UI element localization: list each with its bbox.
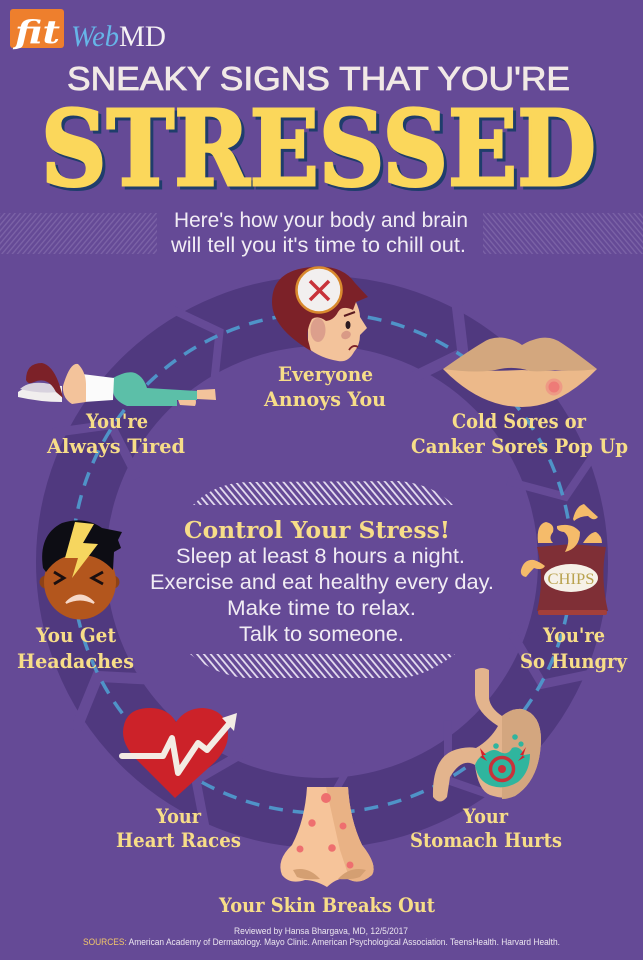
- label: everyone annoys you: Annoys You: [263, 388, 386, 411]
- icon: sleeping person: [18, 363, 216, 406]
- ring: dashed circle: [72, 313, 572, 813]
- center: control your stress: [150, 517, 494, 646]
- hatch band left: [0, 213, 157, 254]
- center: control your stress: Control Your Stress!: [184, 517, 450, 544]
- logo: fit WebMD: MD: [119, 20, 166, 53]
- hatch band right: [483, 213, 643, 254]
- label: headaches: [17, 624, 134, 673]
- center hatch top: [193, 481, 453, 505]
- icon: stomach: [433, 668, 541, 802]
- label: headaches: Headaches: [17, 650, 134, 673]
- label: everyone annoys you: Everyone: [278, 363, 373, 386]
- icon: nose with spots: [280, 787, 374, 887]
- label: everyone annoys you: [263, 363, 386, 411]
- center hatch bottom: [190, 654, 455, 678]
- center: control your stress: Exercise and eat healthy every day.: [150, 571, 494, 594]
- ring: segmented arrow band: [53, 292, 608, 858]
- label: so hungry: [520, 624, 628, 673]
- icon: chips bag: CHIPS: [548, 571, 594, 588]
- subtitle: will tell you it's time to chill out.: [170, 234, 466, 257]
- center: control your stress: Sleep at least 8 hours a night.: [176, 545, 465, 568]
- label: always tired: [46, 410, 185, 458]
- label: so hungry: You're: [542, 624, 605, 647]
- icon: headache face: [40, 520, 122, 620]
- logo: fit WebMD: [10, 9, 166, 53]
- label: stomach hurts: Stomach Hurts: [410, 829, 562, 852]
- label: heart races: Heart Races: [116, 829, 241, 852]
- icon: heart with pulse arrow: [122, 708, 237, 798]
- logo: fit WebMD: fit: [13, 13, 60, 51]
- label: heart races: [116, 805, 241, 852]
- title: sneaky signs: SNEAKY SIGNS THAT YOU'RE: [67, 60, 570, 97]
- logo: fit WebMD: Web: [71, 20, 119, 53]
- label: cold sores: Canker Sores Pop Up: [411, 435, 628, 458]
- label: stomach hurts: Your: [462, 805, 509, 828]
- footer: reviewed by: Reviewed by Hansa Bhargava, MD, 12/5/2017: [234, 926, 408, 936]
- center: control your stress: Talk to someone.: [239, 623, 404, 646]
- icon: chips bag: [521, 504, 608, 615]
- label: heart races: Your: [155, 805, 202, 828]
- label: so hungry: So Hungry: [520, 650, 628, 673]
- label: stomach hurts: [410, 805, 562, 852]
- center: control your stress: Make time to relax.: [227, 597, 416, 620]
- icon: annoyed head: [272, 267, 368, 361]
- label: cold sores: [411, 410, 628, 458]
- label: always tired: You're: [85, 410, 148, 433]
- subtitle: [170, 209, 468, 257]
- subtitle: Here's how your body and brain: [174, 209, 468, 232]
- label: headaches: You Get: [35, 624, 116, 647]
- icon: lips with cold sore: [443, 338, 597, 407]
- label: always tired: Always Tired: [46, 435, 185, 458]
- footer: sources: SOURCES: American Academy of Dermatology. Mayo Clinic. American Psychological Association. TeensHealth. Harvard Health.: [83, 937, 560, 947]
- label: cold sores: Cold Sores or: [452, 410, 587, 433]
- label: skin breaks out: Your Skin Breaks Out: [218, 894, 435, 917]
